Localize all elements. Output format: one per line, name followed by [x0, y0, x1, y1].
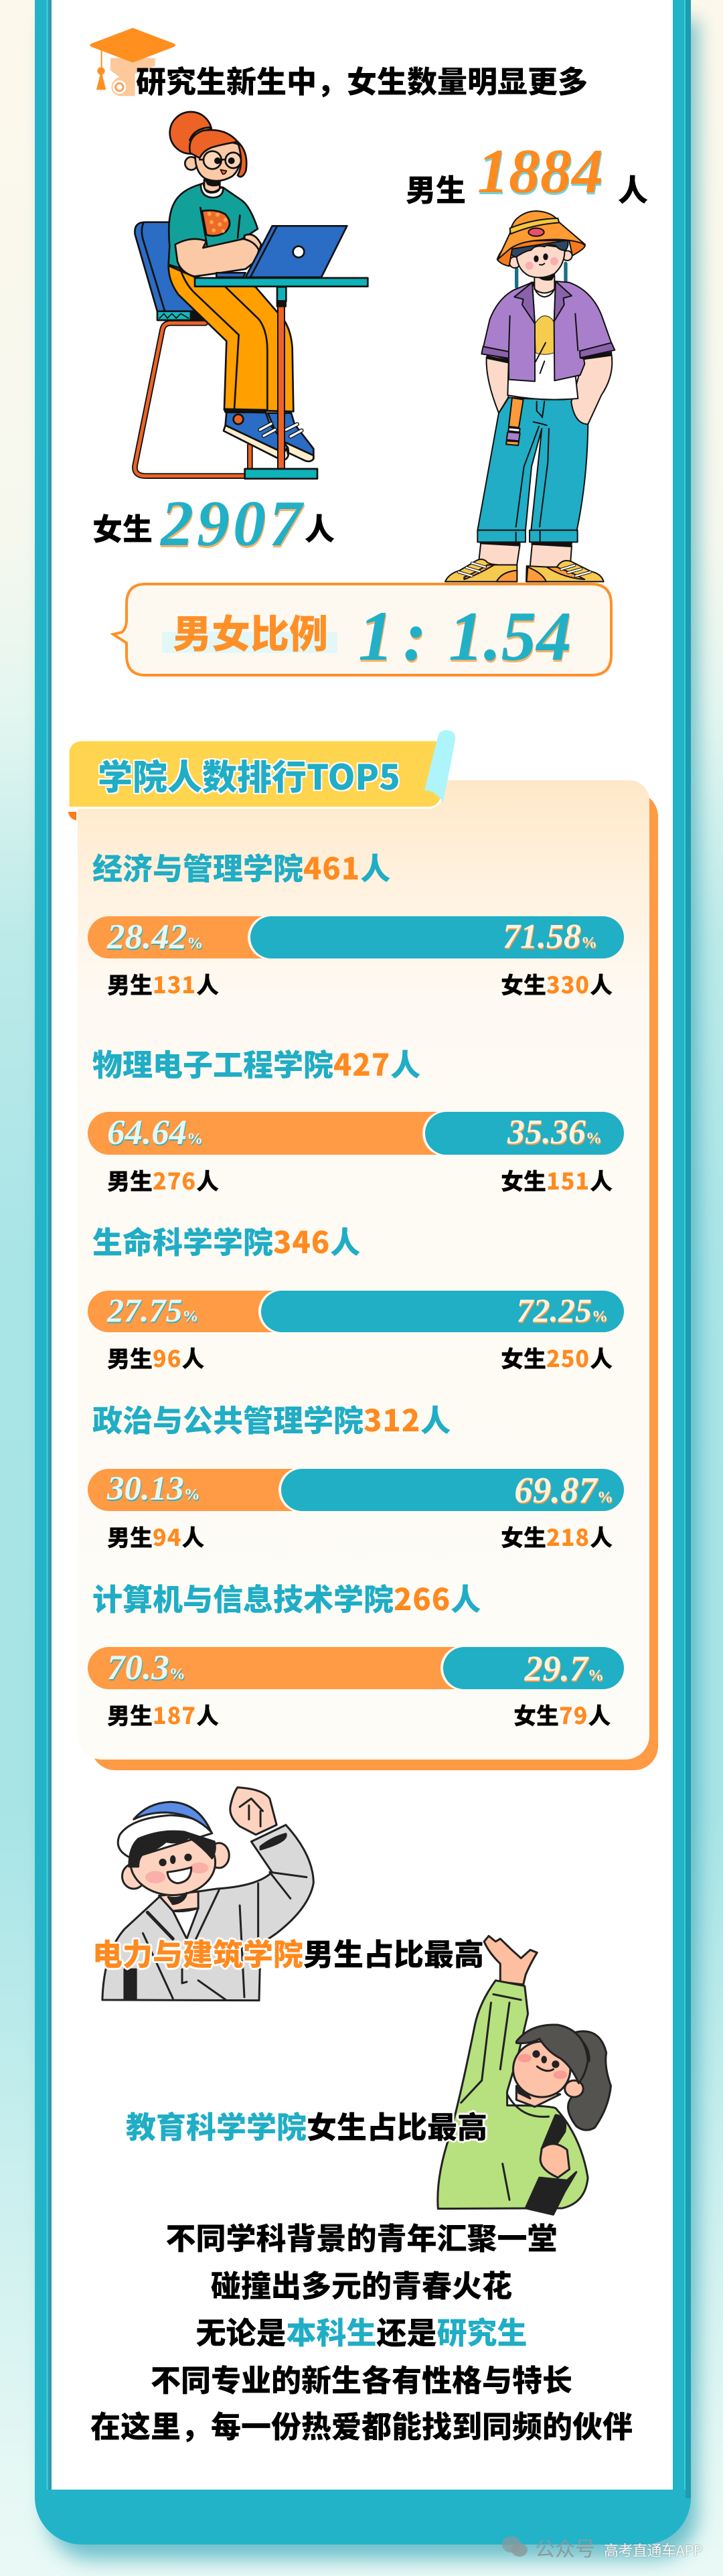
title: graduate freshmen: 研究生新生中，女生数量明显更多	[136, 58, 588, 101]
row: life sciences: 生命科学学院346人	[92, 1218, 360, 1262]
closing text block: 无论是本科生还是研究生	[195, 2309, 528, 2352]
illustration: girl waving	[436, 1934, 612, 2216]
illustration: boy raising fist	[101, 1786, 315, 2001]
head	[170, 112, 246, 198]
closing text block: 碰撞出多元的青春火花	[211, 2262, 512, 2305]
watermark: 公众号	[535, 2532, 595, 2562]
hair	[129, 1831, 215, 1867]
callout: ratio box: 男女比例	[173, 603, 328, 659]
stat: male students: 男生	[406, 166, 466, 210]
row: physics and electronic engineering	[88, 1041, 624, 1196]
heading ribbon: college ranking top 5	[68, 730, 455, 820]
bar: gender split 30.13 / 69.87	[88, 1469, 624, 1511]
hand	[484, 1936, 537, 1985]
bar: gender split 27.75 / 72.25: 27.75%	[107, 1291, 198, 1329]
callout: ratio box	[110, 583, 613, 676]
chair	[135, 222, 250, 476]
row: physics and electronic engineering: 女生151人	[501, 1163, 613, 1196]
strap and hand	[542, 2115, 566, 2153]
closing text block: 不同学科背景的青年汇聚一堂	[165, 2214, 557, 2258]
head	[209, 1843, 229, 1868]
bar: gender split 30.13 / 69.87: 69.87%	[514, 1470, 613, 1510]
jacket details	[125, 1834, 307, 2000]
row: politics and public administration: 女生218人	[501, 1520, 613, 1553]
watermark: 高考直通车APP	[604, 2539, 702, 2561]
trousers	[477, 397, 588, 530]
stat: female students	[92, 488, 335, 560]
chin straps	[517, 263, 566, 287]
bar: gender split 64.64 / 35.36: 64.64%	[107, 1113, 203, 1152]
jacket	[102, 1825, 313, 2001]
cap	[118, 1815, 212, 1858]
closing text block: 不同专业的新生各有性格与特长	[151, 2356, 572, 2400]
bar: gender split 27.75 / 72.25: 72.25%	[517, 1291, 608, 1329]
stat: female students: 人	[305, 505, 335, 549]
row: computer and information technology: 男生187人	[107, 1698, 219, 1731]
illustration: boy in bucket hat	[445, 210, 616, 583]
bar: gender split 28.42 / 71.58	[88, 916, 624, 958]
row: politics and public administration: 政治与公共管理学院312人	[92, 1397, 451, 1440]
row: economics and management	[88, 845, 624, 1000]
trousers	[169, 266, 293, 413]
legs and shoes	[445, 530, 604, 581]
stat: female students: 2907	[161, 488, 305, 560]
watermark	[502, 2532, 703, 2562]
callout: highest female ratio: 教育科学学院女生占比最高	[126, 2103, 487, 2147]
table and laptop	[195, 226, 368, 287]
arm	[175, 234, 261, 277]
row: politics and public administration	[88, 1397, 624, 1553]
bar: gender split 27.75 / 72.25	[88, 1291, 624, 1332]
arms	[487, 354, 612, 424]
bar: gender split 30.13 / 69.87: 30.13%	[107, 1470, 200, 1508]
callout: highest male ratio: 电力与建筑学院男生占比最高	[92, 1930, 484, 1974]
sweater	[438, 1981, 588, 2209]
row: politics and public administration: 男生94人	[107, 1520, 204, 1553]
stat: female students: 女生	[92, 505, 153, 549]
row: economics and management: 女生330人	[501, 967, 613, 1000]
row: economics and management: 男生131人	[107, 967, 219, 1000]
face	[513, 2042, 570, 2097]
neck	[516, 2086, 560, 2106]
row: life sciences	[88, 1218, 624, 1374]
hair	[516, 2025, 588, 2083]
stat: male students: 人	[618, 166, 648, 210]
ponytail	[568, 2031, 611, 2130]
row: physics and electronic engineering: 物理电子工程学院427人	[92, 1041, 420, 1084]
callout: ratio box: 1	[358, 597, 394, 675]
icon: chat bubbles	[502, 2536, 528, 2557]
row: computer and information technology	[88, 1575, 624, 1731]
shirt	[169, 184, 258, 268]
bar: gender split 70.3 / 29.7: 70.3%	[107, 1648, 185, 1687]
stat: male students	[406, 137, 648, 210]
shoes	[224, 413, 313, 461]
panel: college ranking	[78, 780, 649, 1760]
icon: graduation cap	[90, 28, 175, 96]
illustration: woman with laptop	[132, 111, 369, 480]
closing text block: 在这里，每一份热爱都能找到同频的伙伴	[90, 2403, 633, 2446]
row: physics and electronic engineering: 男生276人	[107, 1163, 219, 1196]
row: computer and information technology: 女生79人	[513, 1698, 611, 1731]
closing text block	[90, 2214, 633, 2446]
bar: gender split 70.3 / 29.7: 29.7%	[525, 1648, 604, 1689]
tee and jacket	[481, 281, 615, 400]
head	[497, 211, 585, 297]
heading ribbon: college ranking top 5: 学院人数排行TOP5	[98, 749, 400, 800]
callout: ratio box: :	[403, 597, 426, 675]
table legs	[245, 287, 317, 479]
bar: gender split 28.42 / 71.58: 28.42%	[107, 918, 203, 956]
row: life sciences: 女生250人	[501, 1341, 613, 1374]
stat: male students: 1884	[477, 137, 603, 206]
panel shadow	[91, 792, 658, 1770]
bar: gender split 64.64 / 35.36: 35.36%	[507, 1113, 602, 1151]
row: computer and information technology: 计算机与信息技术学院266人	[92, 1575, 481, 1619]
bar: gender split 70.3 / 29.7	[88, 1647, 624, 1689]
bar: gender split 28.42 / 71.58: 71.58%	[503, 918, 597, 956]
bar: gender split 64.64 / 35.36	[88, 1112, 624, 1155]
callout: ratio box: 1.54	[449, 597, 572, 675]
row: life sciences: 男生96人	[107, 1341, 204, 1374]
hand	[230, 1788, 276, 1835]
face	[145, 1855, 208, 1883]
row: economics and management: 经济与管理学院461人	[92, 845, 390, 888]
